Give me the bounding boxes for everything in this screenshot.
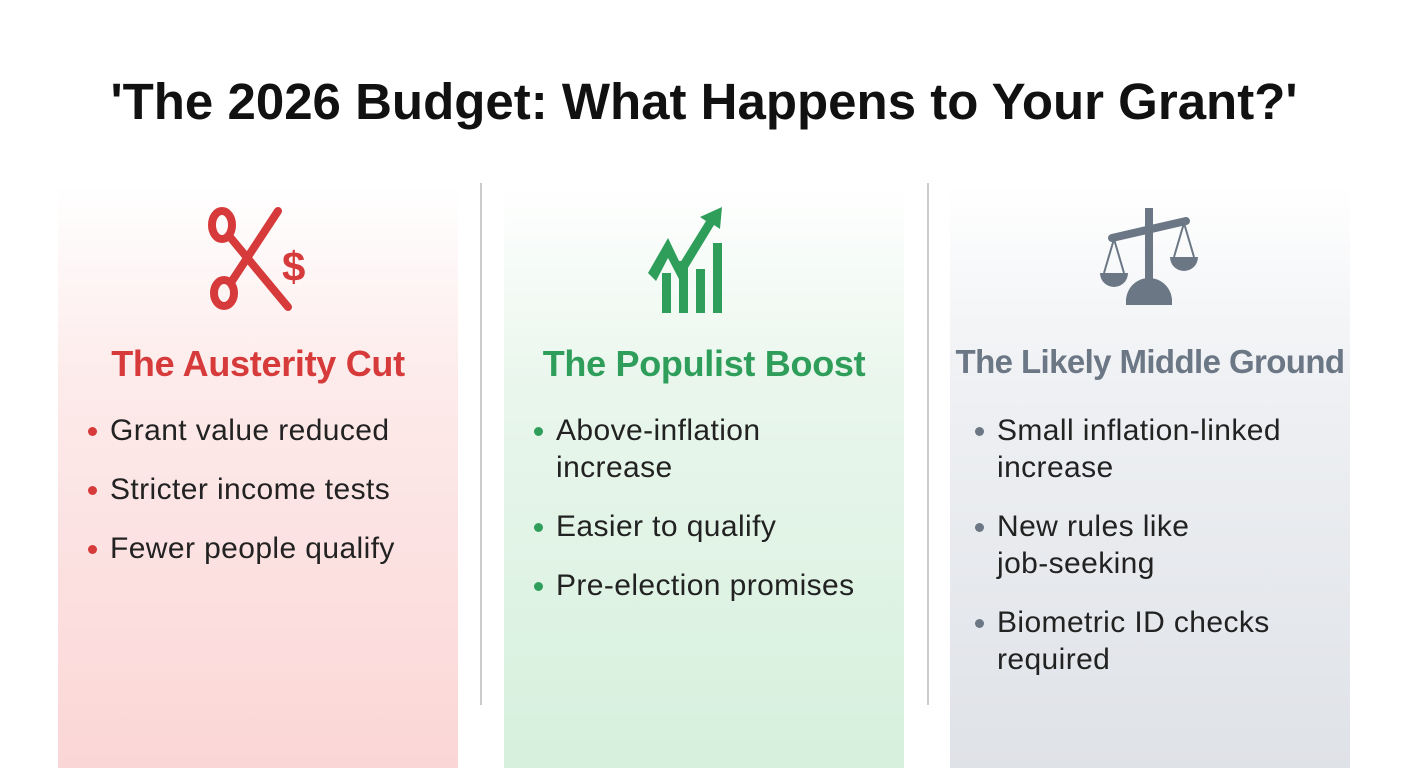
- bullets: [88, 414, 395, 565]
- bullets: Grant value reduced: [110, 414, 389, 447]
- bullets: Above-inflation: [556, 414, 760, 447]
- bullets: Fewer people qualify: [110, 532, 395, 565]
- panel: populist boost: [504, 185, 904, 768]
- panel: austerity cut: [58, 185, 458, 768]
- bullets: Biometric ID checks: [997, 606, 1270, 639]
- heading: The Populist Boost: [543, 343, 865, 384]
- bullets: New rules like: [997, 510, 1189, 543]
- bullets: [534, 414, 855, 602]
- bullets: Pre-election promises: [556, 569, 855, 602]
- icon: scissors cutting dollar: $: [282, 243, 305, 290]
- icon: scales: [1100, 208, 1198, 305]
- bullets: increase: [556, 451, 673, 484]
- bullets: Stricter income tests: [110, 473, 390, 506]
- icon: rising chart: [648, 207, 722, 313]
- bullets: Easier to qualify: [556, 510, 776, 543]
- title: 'The 2026 Budget: What Happens to Your Grant?': [110, 73, 1297, 130]
- panel: middle ground: [950, 185, 1350, 768]
- bullets: job-seeking: [997, 547, 1155, 580]
- bullets: required: [997, 643, 1110, 676]
- heading: The Austerity Cut: [111, 343, 405, 384]
- bullets: increase: [997, 451, 1114, 484]
- bullets: Small inflation-linked: [997, 414, 1281, 447]
- icon: scissors cutting dollar: [208, 207, 305, 311]
- heading: The Likely Middle Ground: [956, 343, 1344, 380]
- bullets: [975, 414, 1281, 676]
